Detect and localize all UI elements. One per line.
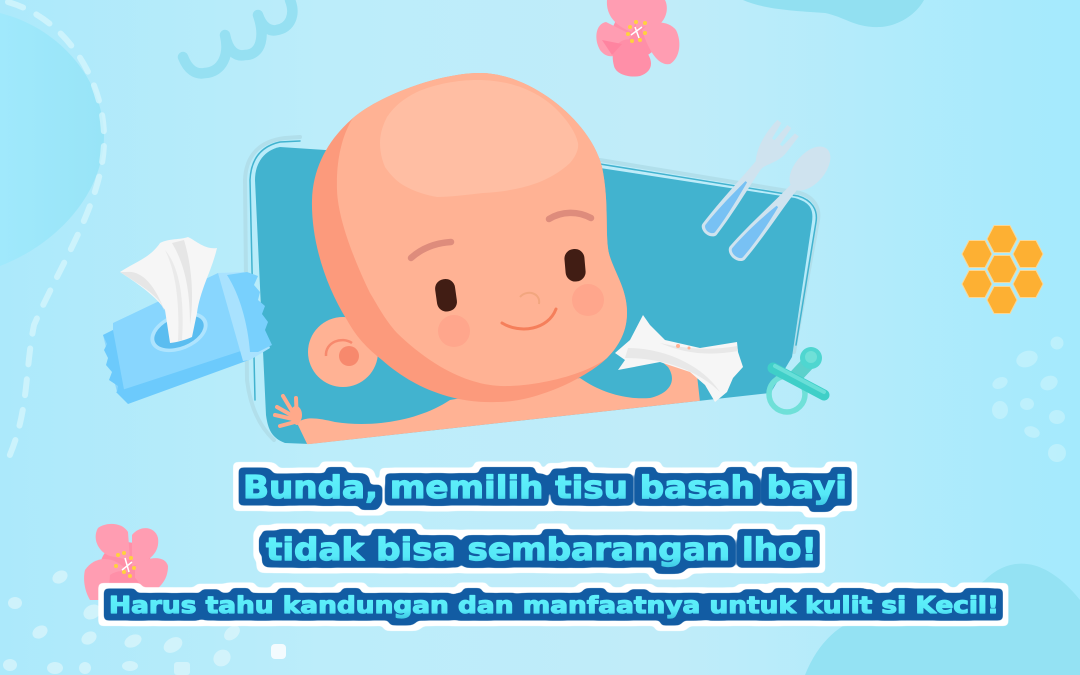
headline line 2: tidak bisa sembarangan lho! bbox=[266, 532, 817, 568]
dots: right bbox=[990, 336, 1066, 462]
icon: pacifier bbox=[769, 347, 824, 412]
baby eye left bbox=[434, 278, 458, 313]
icon: wipes pack bbox=[103, 237, 272, 404]
dashed curve bbox=[4, 2, 104, 468]
baby mouth bbox=[502, 309, 556, 329]
baby eye right bbox=[564, 248, 586, 282]
baby cheek right bbox=[572, 284, 604, 316]
baby body and arms bbox=[298, 363, 700, 444]
subheadline: Harus tahu kandungan dan manfaatnya untuk kulit si Kecil! bbox=[109, 593, 999, 619]
baby eyebrow right bbox=[549, 213, 591, 219]
baby cheek left bbox=[438, 315, 470, 347]
baby head: shade bbox=[312, 73, 627, 402]
blob: bottom right bbox=[805, 564, 1080, 675]
baby ear bbox=[308, 317, 378, 387]
baby hand: left bbox=[275, 396, 302, 426]
baby nose bbox=[520, 293, 539, 304]
dots: bottom left bbox=[3, 568, 286, 675]
mat: outline strokes bbox=[245, 137, 818, 440]
icon: flower top bbox=[596, 0, 679, 77]
baby head: highlight bbox=[380, 80, 578, 197]
headline line 1: Bunda, memilih tisu basah bayi bbox=[243, 470, 847, 506]
icon: fork bbox=[695, 118, 800, 243]
baby eyebrow left bbox=[411, 242, 451, 258]
icon: flower bottom bbox=[84, 524, 168, 600]
mat: bath scene bbox=[255, 147, 812, 450]
blob: left bbox=[0, 13, 104, 266]
blob: top right bbox=[743, 0, 924, 27]
squiggle: top bbox=[183, 0, 292, 73]
icon: wipe in hand bbox=[615, 315, 743, 402]
icon: spoon bbox=[722, 139, 838, 268]
baby head: face bbox=[337, 73, 627, 386]
icon: honeycomb bbox=[962, 226, 1043, 314]
